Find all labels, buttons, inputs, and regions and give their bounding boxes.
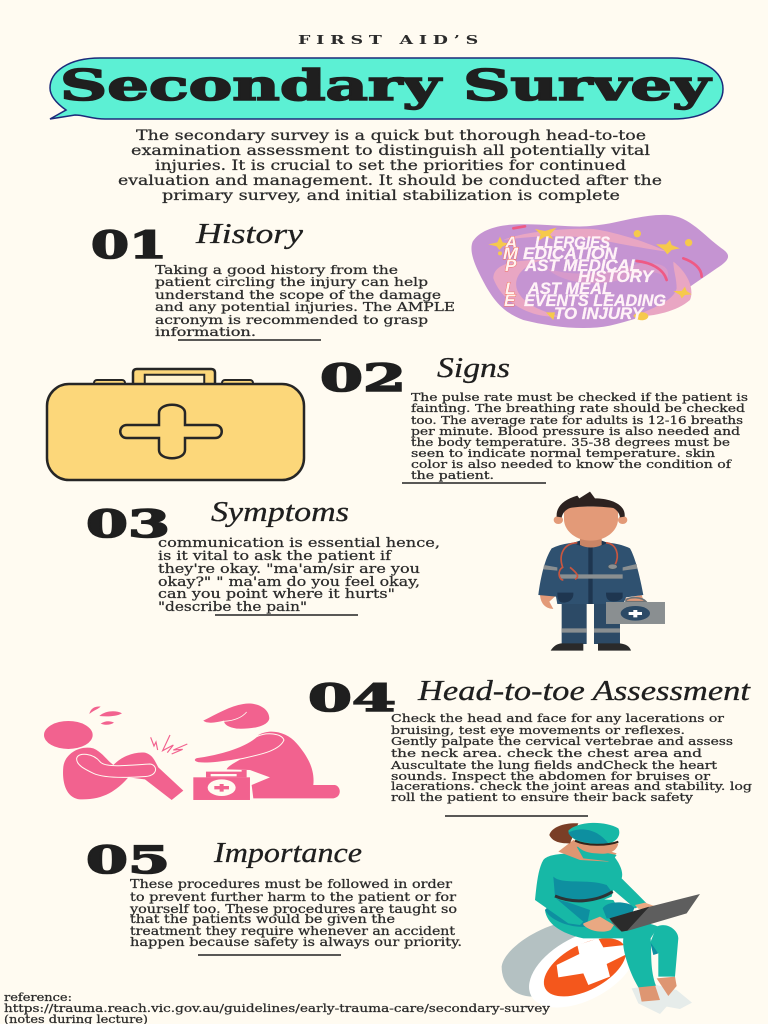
section 02: body text: color is also needed to know the condition of bbox=[411, 458, 732, 471]
section 01: body text bbox=[155, 263, 455, 339]
section 01: body text: Taking a good history from the bbox=[155, 263, 398, 277]
section 01: body text: patient circling the injury can help bbox=[155, 275, 428, 289]
section 01: body text: information. bbox=[155, 325, 256, 339]
section 03: body text: they're okay. "ma'am/sir are you bbox=[158, 562, 420, 577]
AMPLE acronym blob: P bbox=[505, 256, 517, 275]
section 02: body text: too. The average rate for adults is 12-16 breaths bbox=[411, 414, 743, 427]
title banner bbox=[50, 58, 723, 119]
intro paragraph: examination assessment to distinguish all potentially vital bbox=[131, 143, 650, 159]
section 04: body text: sounds. Inspect the abdomen for bruises or bbox=[391, 770, 711, 783]
section 04: body text bbox=[390, 712, 752, 804]
intro paragraph: evaluation and management. It should be conducted after the bbox=[118, 173, 662, 189]
section 03: body text: is it vital to ask the patient if bbox=[158, 549, 392, 564]
section 05: heading: Importance bbox=[213, 837, 362, 869]
section 05: body text bbox=[129, 877, 462, 949]
section 01: body text: understand the scope of the damage bbox=[155, 288, 441, 302]
section 03: body text bbox=[158, 536, 440, 615]
intro paragraph bbox=[118, 128, 662, 204]
section 02: body text: per minute. Blood pressure is also needed and bbox=[411, 425, 740, 438]
AMPLE acronym blob: A bbox=[504, 233, 517, 252]
reference note: reference: bbox=[4, 991, 72, 1004]
section 04: body text: Gently palpate the cervical vertebrae and assess bbox=[391, 735, 733, 748]
section 03: heading: Symptoms bbox=[211, 496, 349, 528]
AMPLE acronym blob: LLERGIES bbox=[535, 234, 610, 252]
AMPLE acronym blob: AST MEAL bbox=[527, 280, 612, 298]
section 02: body text: fainting. The breathing rate should be checked bbox=[411, 402, 745, 415]
section 05: body text: yourself too. These procedures are taught so bbox=[129, 902, 457, 916]
section 03: body text: "describe the pain" bbox=[158, 600, 307, 615]
section 02: body text bbox=[411, 391, 748, 482]
intro paragraph: The secondary survey is a quick but thorough head-to-toe bbox=[136, 128, 646, 144]
section 03: body text: okay?" " ma'am do you feel okay, bbox=[158, 575, 420, 590]
section 02: body text: the patient. bbox=[411, 469, 494, 482]
AMPLE acronym blob: L bbox=[505, 279, 515, 298]
AMPLE acronym blob: EVENTS LEADING bbox=[524, 292, 666, 310]
section 04: body text: roll the patient to ensure their back safety bbox=[391, 791, 694, 804]
section 02: number: 02 bbox=[320, 356, 406, 400]
section 02: body text: the body temperature. 35-38 degrees must be bbox=[411, 436, 730, 449]
section 05: number: 05 bbox=[86, 838, 170, 882]
intro paragraph: primary survey, and initial stabilization is complete bbox=[162, 188, 620, 204]
AMPLE acronym blob bbox=[471, 215, 728, 328]
section 03: body text: communication is essential hence, bbox=[158, 536, 440, 551]
section 05: body text: happen because safety is always our priority. bbox=[130, 935, 462, 949]
section 02: heading: Signs bbox=[437, 352, 510, 384]
section 02: body text: seen to indicate normal temperature. skin bbox=[411, 447, 715, 460]
title banner: Secondary Survey bbox=[60, 61, 712, 110]
section 01: body text: acronym is recommended to grasp bbox=[155, 313, 428, 327]
section 04: heading: Head-to-toe Assessment bbox=[417, 675, 751, 707]
AMPLE acronym blob: HISTORY bbox=[578, 268, 655, 286]
reference note bbox=[4, 991, 551, 1024]
illustration: nurse with laptop on first aid seat bbox=[502, 823, 700, 1024]
section 05: body text: treatment they require whenever an accident bbox=[130, 924, 455, 938]
eyebrow: First Aid's: FIRST AID’S bbox=[298, 33, 484, 47]
section 04: body text: the neck area. check the chest area and bbox=[391, 747, 702, 760]
icon: first aid case bbox=[47, 369, 304, 480]
section 04: body text: Check the head and face for any lacerations or bbox=[391, 712, 725, 725]
illustration: paramedic with kit bbox=[538, 492, 665, 651]
reference note: https://trauma.reach.vic.gov.au/guidelines/early-trauma-care/secondary-survey bbox=[4, 1002, 551, 1015]
section 03: number: 03 bbox=[86, 502, 170, 546]
AMPLE acronym blob: TO INJURY bbox=[554, 305, 645, 323]
section 05: body text: to prevent further harm to the patient or for bbox=[130, 890, 456, 904]
section 05: body text: that the patients would be given the bbox=[130, 912, 395, 926]
illustration: helper treating injured person bbox=[44, 704, 340, 800]
intro paragraph: injuries. It is crucial to set the priorities for continued bbox=[155, 158, 626, 174]
section 05: body text: These procedures must be followed in order bbox=[130, 877, 452, 891]
section 04: body text: bruising, test eye movements or reflexes. bbox=[391, 724, 685, 737]
section 01: number: 01 bbox=[91, 223, 167, 267]
section 03: body text: can you point where it hurts" bbox=[158, 587, 395, 602]
section 02: body text: The pulse rate must be checked if the patient is bbox=[411, 391, 748, 404]
AMPLE acronym blob: M bbox=[503, 244, 519, 263]
section 04: number: 04 bbox=[308, 676, 396, 720]
AMPLE acronym blob: AST MEDICAL bbox=[524, 257, 640, 275]
AMPLE acronym blob: EDICATION bbox=[523, 245, 618, 263]
section 04: body text: Auscultate the lung fields andCheck the heart bbox=[390, 759, 718, 772]
section 01: heading: History bbox=[195, 218, 303, 250]
section 01: body text: and any potential injuries. The AMPLE bbox=[155, 300, 455, 314]
AMPLE acronym blob: E bbox=[504, 291, 516, 310]
section 04: body text: lacerations. check the joint areas and stability. log bbox=[391, 780, 752, 793]
